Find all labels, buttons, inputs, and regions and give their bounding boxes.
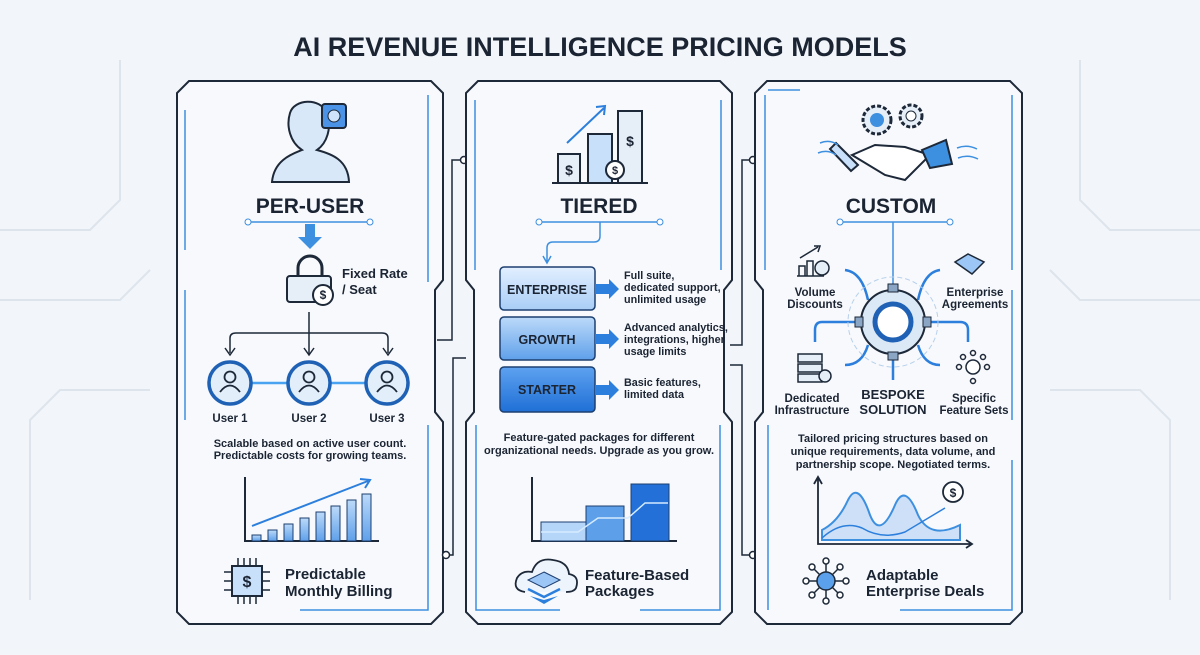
description: Tailored pricing structures based on xyxy=(798,433,988,445)
panel: custom: Feature Sets xyxy=(939,405,1009,417)
icon: handshake with gears xyxy=(818,105,978,180)
text: fixed rate: Fixed Rate xyxy=(342,266,408,281)
panel: custom: partnership scope. Negotiated terms. xyxy=(796,459,990,471)
title: AI REVENUE INTELLIGENCE PRICING MODELS xyxy=(293,32,907,62)
panel: custom: unique requirements, data volume, and xyxy=(791,446,995,458)
heading: tiered: TIERED xyxy=(560,195,638,218)
bar chart xyxy=(245,477,379,541)
panel: per-user: / Seat xyxy=(342,282,377,297)
panel: custom: Agreements xyxy=(942,299,1008,311)
description: Feature-gated packages for different xyxy=(504,432,695,444)
icon: growth bars xyxy=(552,106,648,183)
panel: custom: Discounts xyxy=(787,299,843,311)
panel: per-user: Predictable costs for growing teams. xyxy=(214,450,406,462)
tier descriptions: usage limits xyxy=(624,346,686,358)
icon: lock: $ xyxy=(320,288,327,302)
users: User 1 xyxy=(212,413,248,425)
icon: network hub xyxy=(803,558,849,604)
connectors between panels xyxy=(437,160,755,555)
wave chart xyxy=(814,477,972,548)
arrow down xyxy=(298,224,322,249)
icon: growth bars: $ xyxy=(626,133,634,149)
tier boxes: ENTERPRISE xyxy=(507,283,587,297)
tier boxes xyxy=(500,267,619,412)
users: User 2 xyxy=(291,413,327,425)
panel: custom: Specific xyxy=(952,393,997,405)
wave chart: $ xyxy=(950,486,957,500)
panel: tiered: Packages xyxy=(585,583,654,600)
hub gear with arrows xyxy=(815,270,968,380)
tier descriptions: unlimited usage xyxy=(624,294,706,306)
icon: cloud layers xyxy=(516,560,577,604)
text: bespoke: BESPOKE xyxy=(861,387,925,402)
icon: handshake small xyxy=(955,254,984,274)
tier descriptions: dedicated support, xyxy=(624,282,721,294)
users: User 3 xyxy=(369,413,405,425)
panel: custom: Volume xyxy=(795,287,835,299)
panel: custom xyxy=(755,81,1022,624)
icon: growth bars: $ xyxy=(612,165,618,177)
icon: servers xyxy=(798,354,831,382)
icon: chip xyxy=(224,558,270,604)
text: predictable billing: Predictable xyxy=(285,566,366,583)
tier boxes: STARTER xyxy=(518,383,576,397)
description: Scalable based on active user count. xyxy=(214,438,406,450)
text: adaptable deals: Adaptable xyxy=(866,567,939,584)
bar chart xyxy=(532,477,677,541)
tier descriptions: Basic features, xyxy=(624,377,701,389)
panel: custom: Enterprise xyxy=(947,287,1003,299)
tier boxes: GROWTH xyxy=(519,333,575,347)
icon: growth bars: $ xyxy=(565,162,573,178)
icon: volume discounts xyxy=(797,246,829,276)
tier descriptions xyxy=(624,270,728,401)
panel: tiered xyxy=(466,81,732,624)
tier descriptions: Full suite, xyxy=(624,270,674,282)
icon: network xyxy=(956,350,990,384)
icon: lock xyxy=(287,256,333,305)
icon: chip: $ xyxy=(243,574,252,591)
tree arrows xyxy=(230,312,388,354)
tier descriptions: Advanced analytics, xyxy=(624,322,728,334)
panel: custom: Enterprise Deals xyxy=(866,583,984,600)
heading: custom: CUSTOM xyxy=(846,195,936,218)
panel: custom: Dedicated xyxy=(785,393,839,405)
text: feature-based: Feature-Based xyxy=(585,567,689,584)
icon: person with chip xyxy=(272,102,349,182)
tier descriptions: integrations, higher xyxy=(624,334,726,346)
heading: per-user: PER-USER xyxy=(256,195,364,218)
tier descriptions: limited data xyxy=(624,389,685,401)
panel: custom: SOLUTION xyxy=(859,402,927,417)
panel: tiered: organizational needs. Upgrade as you grow. xyxy=(484,445,714,457)
users xyxy=(209,362,408,425)
panel: per-user: Monthly Billing xyxy=(285,583,392,600)
panel: custom: Infrastructure xyxy=(775,405,849,417)
panel: per-user xyxy=(177,81,443,624)
